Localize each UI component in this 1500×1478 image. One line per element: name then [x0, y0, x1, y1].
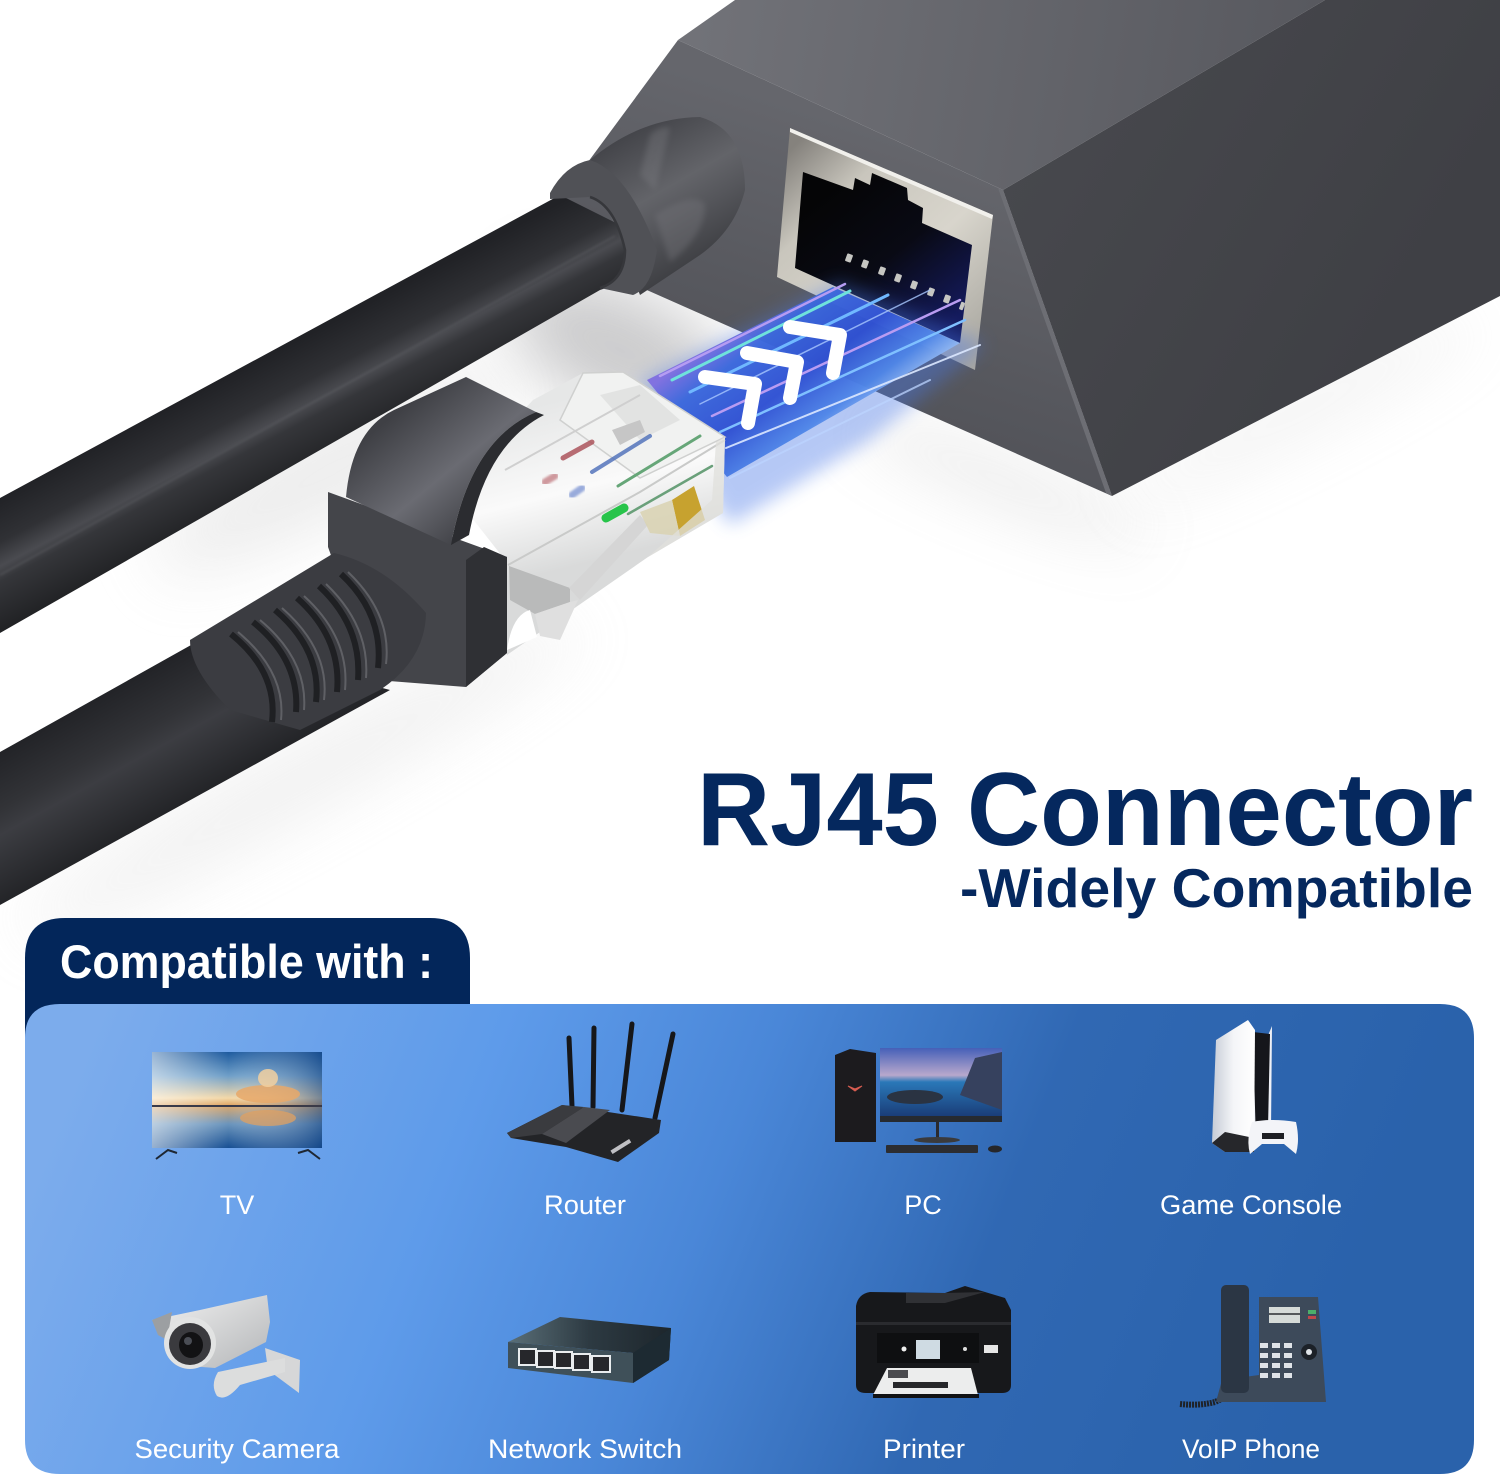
label: TV: TV — [220, 1190, 254, 1220]
cable highlight — [0, 236, 615, 575]
icon: network switch — [508, 1317, 671, 1383]
icon: game console — [1212, 1020, 1298, 1154]
icon: VoIP phone — [1180, 1285, 1326, 1405]
device top face — [678, 0, 1325, 190]
label: Printer: Printer — [883, 1434, 965, 1464]
device panel — [25, 1004, 1474, 1474]
plug cable — [0, 640, 390, 905]
label: Game Console: Game Console — [1160, 1190, 1342, 1220]
data light beam — [640, 282, 985, 525]
device front face — [560, 40, 1112, 496]
tab label: Compatible with : — [60, 935, 433, 988]
label: Network Switch: Network Switch — [488, 1434, 682, 1464]
label: Security Camera: Security Camera — [134, 1434, 340, 1464]
coloured wires — [545, 436, 712, 518]
direction arrows — [705, 327, 840, 423]
device strain relief boot — [590, 117, 745, 295]
port contact pins — [845, 253, 965, 310]
plug head front face — [466, 547, 507, 687]
gold contact — [672, 486, 705, 536]
connection cable to device — [0, 117, 745, 633]
icon: printer — [856, 1286, 1011, 1398]
label: Router: Router — [544, 1190, 626, 1220]
plug locking fin — [346, 377, 536, 545]
plug head base — [328, 492, 507, 687]
icon: TV — [152, 1052, 322, 1159]
icon: desktop PC — [835, 1048, 1002, 1153]
device right side face — [1003, 0, 1500, 496]
icon: security camera — [152, 1295, 300, 1398]
port metal frame — [777, 128, 993, 370]
headline: RJ45 Connector — [697, 752, 1473, 868]
subheading: -Widely Compatible — [960, 857, 1473, 919]
clear plug body — [450, 372, 725, 655]
device: PoE adapter body — [560, 0, 1500, 496]
boot collar ring — [550, 160, 657, 295]
icon: router — [507, 1024, 673, 1162]
RJ45 port — [777, 128, 993, 370]
strain relief ridges — [190, 553, 426, 730]
label: PC: PC — [904, 1190, 942, 1220]
port dark opening — [795, 172, 972, 343]
cable jacket — [0, 195, 630, 633]
compatible-with tab — [25, 918, 470, 1040]
label: VoIP Phone: VoIP Phone — [1182, 1434, 1320, 1464]
Ethernet plug — [0, 372, 725, 905]
soft shadows on surface — [6, 245, 1487, 961]
